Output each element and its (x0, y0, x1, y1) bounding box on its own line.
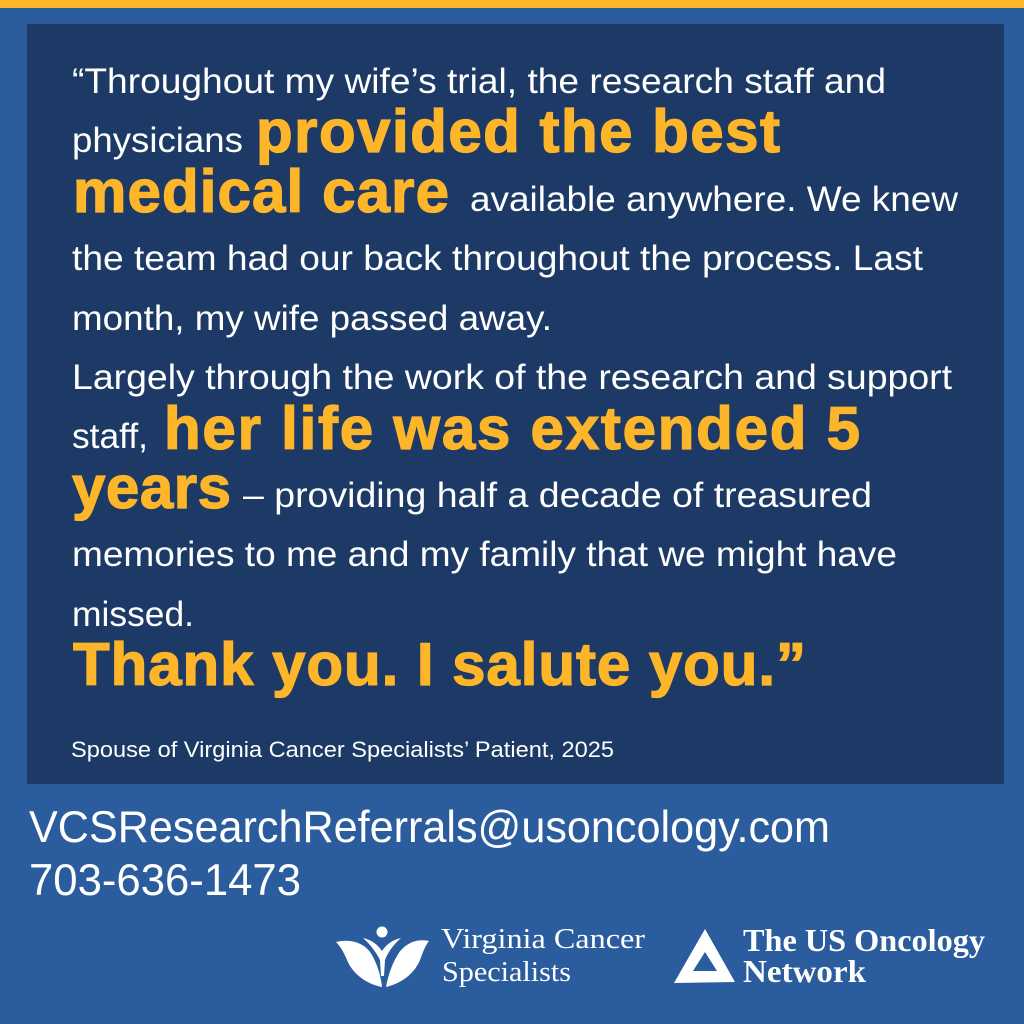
logo: The US Oncology Network: Network (743, 953, 866, 989)
quote text (72, 62, 959, 698)
quote text: medical care (73, 158, 449, 225)
quote text: years (72, 454, 231, 521)
quote text: memories to me and my family that we might have (72, 535, 897, 574)
quote text: the team had our back throughout the process. Last (72, 239, 923, 278)
contact details: VCSResearchReferrals@usoncology.com (29, 803, 830, 852)
logo: Virginia Cancer Specialists (336, 923, 645, 988)
quote text: available anywhere. We knew (470, 180, 959, 219)
quote text: Thank you. I salute you.” (73, 631, 806, 698)
quote text: – providing half a decade of treasured (243, 476, 872, 515)
logo text: Virginia Cancer (441, 923, 645, 955)
icon: triangle (674, 929, 735, 983)
panel: quote (27, 24, 1004, 784)
quote text: physicians (72, 121, 243, 160)
quote text: “Throughout my wife’s trial, the research staff and (72, 62, 886, 101)
icon: figure and petals (336, 926, 429, 987)
top accent bar (0, 0, 1024, 8)
quote text: provided the best (256, 98, 780, 165)
attribution: Spouse of Virginia Cancer Specialists’ Patient, 2025 (71, 737, 614, 762)
logo text: The US Oncology (743, 922, 985, 958)
contact details (29, 803, 830, 905)
logo: Virginia Cancer Specialists: Specialists (442, 956, 571, 988)
quote text: her life was extended 5 (164, 395, 860, 462)
quote text: missed. (72, 595, 194, 634)
quote text: Largely through the work of the research and support (72, 358, 952, 397)
quote text: month, my wife passed away. (72, 299, 552, 338)
logo: The US Oncology Network (674, 922, 985, 989)
quote text: staff, (72, 417, 148, 456)
contact details: 703-636-1473 (29, 856, 301, 905)
